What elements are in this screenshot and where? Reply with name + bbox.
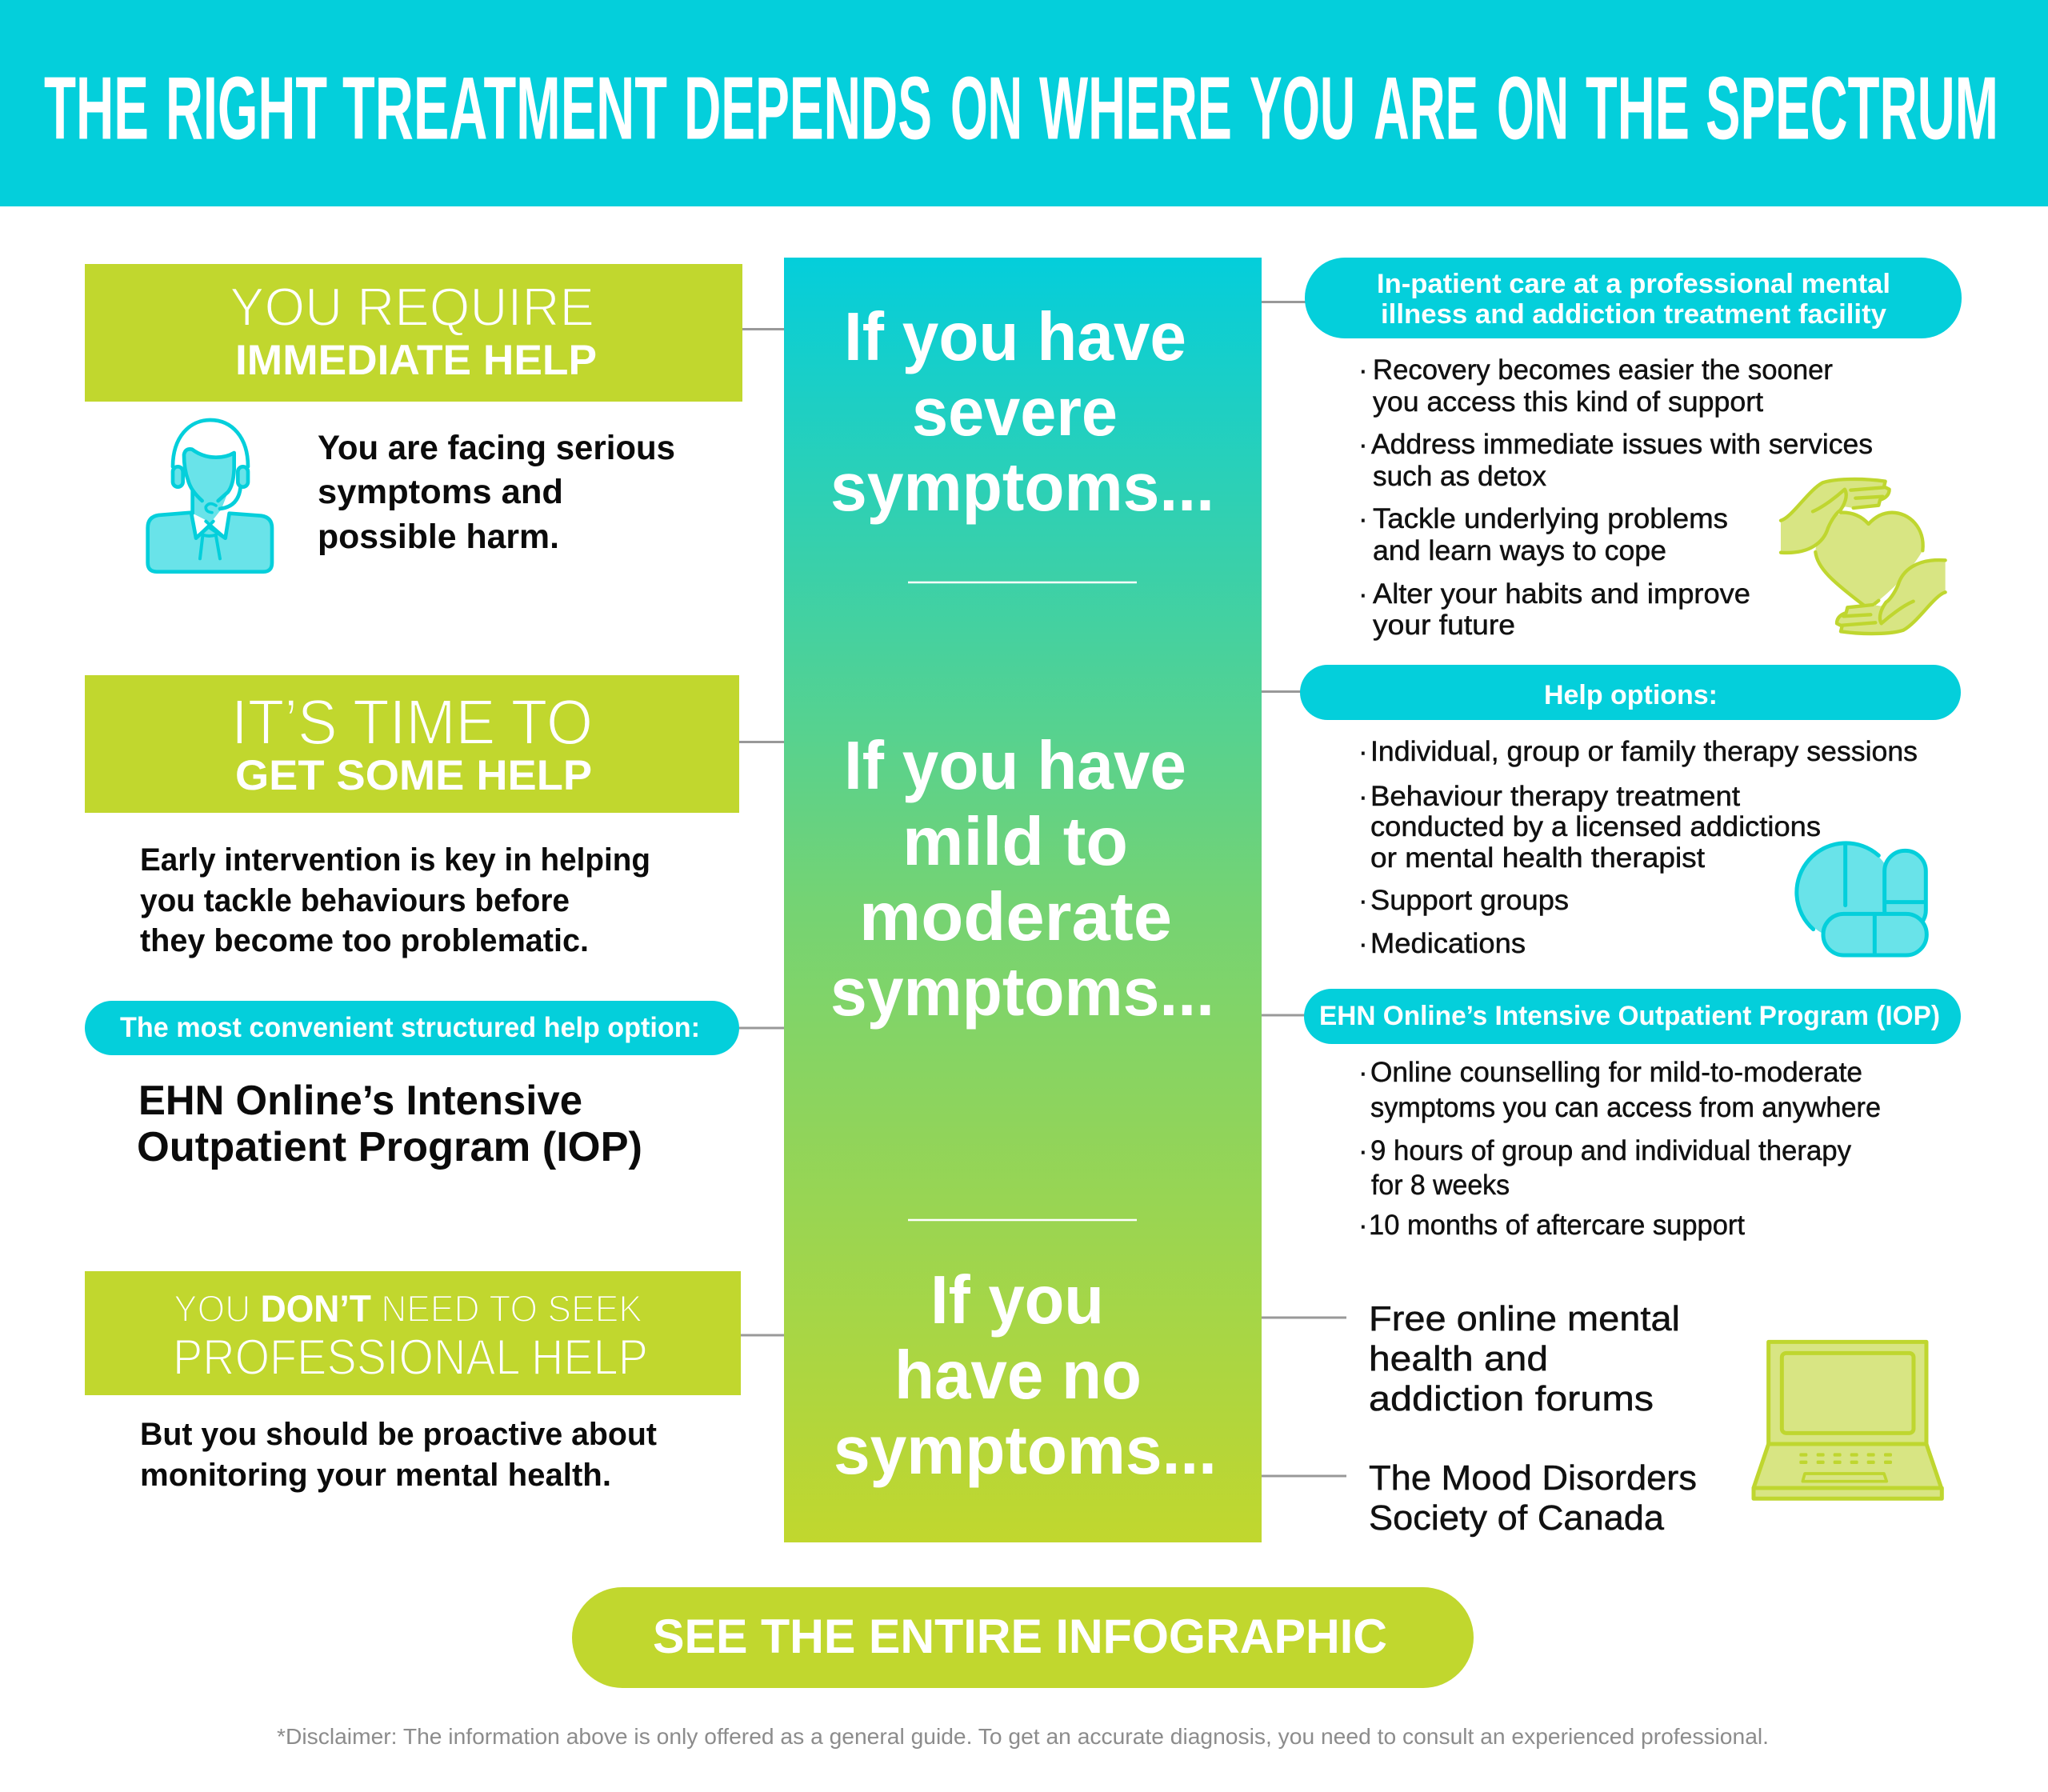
pill: EHN online IOP: EHN Online’s Intensive Outpatient Program (IOP) bbox=[1319, 1001, 1940, 1031]
icon: support agent with headset bbox=[148, 420, 272, 572]
list: in-patient benefits: Tackle underlying problems bbox=[1373, 503, 1728, 534]
title banner: YOU bbox=[1250, 59, 1355, 158]
text: early intervention: you tackle behaviours before bbox=[140, 883, 570, 918]
heading: severe symptoms: If you have bbox=[844, 299, 1186, 375]
panel: you require immediate help: YOU REQUIRE bbox=[230, 277, 594, 338]
heading: severe symptoms: severe bbox=[912, 374, 1118, 450]
text: free forums: addiction forums bbox=[1369, 1379, 1654, 1418]
title banner: THE bbox=[1586, 59, 1690, 158]
pill: EHN online IOP bbox=[1304, 989, 1961, 1044]
list: IOP details: · bbox=[1358, 1057, 1368, 1088]
text: facing serious symptoms bbox=[318, 429, 675, 556]
title banner bbox=[0, 0, 2048, 206]
list: IOP details bbox=[1358, 1057, 1881, 1241]
title banner: TREATMENT bbox=[342, 59, 667, 158]
list: in-patient benefits bbox=[1358, 354, 1873, 641]
title banner: DEPENDS bbox=[684, 59, 932, 158]
button: see the entire infographic bbox=[572, 1587, 1474, 1688]
list: IOP details: · bbox=[1358, 1135, 1368, 1166]
list: in-patient benefits: · bbox=[1358, 354, 1368, 386]
pill: most convenient option: The most convenient structured help option: bbox=[120, 1012, 700, 1043]
pill: in-patient care bbox=[1305, 258, 1962, 338]
list: IOP details: for 8 weeks bbox=[1371, 1170, 1510, 1201]
list: in-patient benefits: and learn ways to cope bbox=[1373, 535, 1666, 566]
heading: mild to moderate symptoms: mild to bbox=[902, 804, 1128, 880]
list: help options: Individual, group or family therapy sessions bbox=[1370, 736, 1918, 767]
pill: in-patient care: illness and addiction treatment facility bbox=[1381, 299, 1886, 330]
heading: mild to moderate symptoms: moderate bbox=[859, 879, 1172, 955]
list: in-patient benefits: · bbox=[1358, 503, 1368, 534]
panel: it's time to get some help: IT’S TIME TO bbox=[231, 686, 593, 758]
text: be proactive: monitoring your mental health. bbox=[140, 1458, 611, 1493]
list: in-patient benefits: Recovery becomes easier the sooner bbox=[1373, 354, 1833, 386]
list: help options: or mental health therapist bbox=[1370, 842, 1705, 874]
panel: it's time to get some help bbox=[85, 675, 739, 813]
panel: centre gradient column bbox=[784, 258, 1262, 1542]
title banner: ON bbox=[1497, 59, 1569, 158]
heading: no symptoms: If you bbox=[930, 1262, 1104, 1338]
panel: you don't need professional help: YOU DON’T NEED TO SEEK bbox=[174, 1287, 642, 1330]
heading: mild to moderate symptoms: symptoms... bbox=[830, 954, 1214, 1030]
pill: in-patient care: In-patient care at a professional mental bbox=[1377, 269, 1890, 299]
text: be proactive bbox=[140, 1417, 657, 1493]
title banner: ARE bbox=[1374, 59, 1478, 158]
panel: you require immediate help bbox=[85, 264, 742, 402]
list: in-patient benefits: · bbox=[1358, 429, 1368, 460]
text: mood disorders society: The Mood Disorders bbox=[1369, 1458, 1697, 1498]
pill: help options bbox=[1300, 665, 1961, 720]
list: help options: · bbox=[1358, 885, 1368, 916]
heading: no symptoms: have no bbox=[894, 1338, 1142, 1414]
text: facing serious symptoms: possible harm. bbox=[318, 518, 559, 556]
text: EHN online program name: Outpatient Program (IOP) bbox=[137, 1124, 642, 1170]
text: free forums: health and bbox=[1369, 1339, 1548, 1378]
text: mood disorders society bbox=[1369, 1458, 1697, 1538]
list: in-patient benefits: you access this kind of support bbox=[1373, 386, 1763, 418]
text: early intervention bbox=[140, 842, 650, 958]
icon: pills and capsules bbox=[1797, 843, 1926, 955]
list: IOP details: Online counselling for mild-to-moderate bbox=[1370, 1057, 1862, 1088]
text: free forums bbox=[1369, 1299, 1680, 1418]
list: help options: Medications bbox=[1370, 928, 1526, 959]
list: IOP details: symptoms you can access from anywhere bbox=[1370, 1092, 1881, 1123]
text: facing serious symptoms: You are facing serious bbox=[318, 429, 675, 467]
text: EHN online program name bbox=[137, 1078, 642, 1170]
icon: laptop bbox=[1754, 1342, 1942, 1498]
panel: you don't need professional help bbox=[85, 1271, 741, 1395]
title banner: THE bbox=[44, 59, 149, 158]
title banner: WHERE bbox=[1039, 59, 1232, 158]
list: help options bbox=[1358, 736, 1918, 959]
list: help options: Support groups bbox=[1370, 885, 1569, 916]
text: mood disorders society: Society of Canada bbox=[1369, 1498, 1665, 1538]
heading: no symptoms bbox=[834, 1262, 1217, 1489]
heading: mild to moderate symptoms: If you have bbox=[844, 728, 1186, 804]
pill: most convenient option bbox=[85, 1001, 739, 1055]
list: in-patient benefits: Address immediate issues with services bbox=[1371, 429, 1873, 460]
heading: severe symptoms bbox=[830, 299, 1214, 526]
heading: no symptoms: symptoms... bbox=[834, 1413, 1217, 1489]
title banner: ON bbox=[950, 59, 1022, 158]
list: in-patient benefits: such as detox bbox=[1373, 461, 1546, 492]
panel: you don't need professional help: PROFESSIONAL HELP bbox=[173, 1330, 648, 1386]
heading: mild to moderate symptoms bbox=[830, 728, 1214, 1030]
list: in-patient benefits: · bbox=[1358, 578, 1368, 610]
list: IOP details: · bbox=[1358, 1210, 1368, 1241]
title banner: RIGHT bbox=[166, 59, 327, 158]
list: help options: · bbox=[1358, 781, 1368, 812]
text: facing serious symptoms: symptoms and bbox=[318, 473, 563, 511]
panel: it's time to get some help: GET SOME HELP bbox=[235, 752, 592, 799]
icon: hands holding heart bbox=[1781, 479, 1946, 634]
list: IOP details: 10 months of aftercare support bbox=[1369, 1210, 1745, 1241]
disclaimer: *Disclaimer: The information above is only offered as a general guide. To get an accurate diagnosis, you need to consult an experienced professional. bbox=[277, 1724, 1769, 1749]
text: EHN online program name: EHN Online’s Intensive bbox=[138, 1078, 582, 1124]
pill: help options: Help options: bbox=[1544, 680, 1718, 710]
heading: severe symptoms: symptoms... bbox=[830, 450, 1214, 526]
list: help options: conducted by a licensed addictions bbox=[1370, 811, 1821, 842]
panel: you require immediate help: IMMEDIATE HELP bbox=[235, 337, 597, 384]
text: free forums: Free online mental bbox=[1369, 1299, 1680, 1338]
button: see the entire infographic: SEE THE ENTIRE INFOGRAPHIC bbox=[653, 1610, 1387, 1663]
text: be proactive: But you should be proactive about bbox=[140, 1417, 657, 1452]
list: in-patient benefits: Alter your habits and improve bbox=[1373, 578, 1750, 610]
list: in-patient benefits: your future bbox=[1373, 610, 1515, 641]
list: help options: · bbox=[1358, 928, 1368, 959]
list: help options: Behaviour therapy treatment bbox=[1370, 781, 1740, 812]
list: help options: · bbox=[1358, 736, 1368, 767]
text: early intervention: they become too problematic. bbox=[140, 923, 589, 958]
text: early intervention: Early intervention is key in helping bbox=[140, 842, 650, 878]
list: IOP details: 9 hours of group and individual therapy bbox=[1370, 1135, 1851, 1166]
